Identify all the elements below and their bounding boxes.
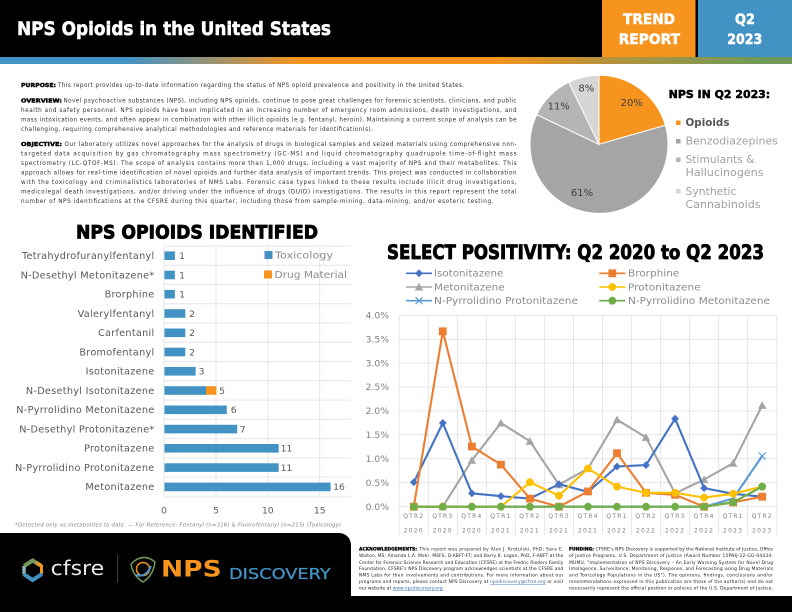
line chart legend: Protonitazene [628, 282, 701, 293]
line chart: select positivity: QTR2 [403, 513, 424, 520]
text block: purpose: This report provides up-to-date information regarding the status of NPS opioid prevalence and positivity in the United States. [57, 83, 464, 89]
line chart: select positivity: 2023 [752, 527, 772, 534]
pie legend: Synthetic [686, 187, 736, 198]
logo: NPS Discovery: DISCOVERY [229, 565, 332, 583]
line chart: select positivity: 3.0% [366, 358, 389, 369]
text block: overview: mass intoxication events, and often appear in combination with other illicit opioids (e.g. fentanyl, heroin). Maintaining a current scope of analysis can be [21, 118, 517, 124]
logo: NPS Discovery: NPS [161, 558, 222, 583]
bar chart: NPS opioids identified: N-Desethyl Metonitazene* [21, 270, 154, 281]
bar chart: NPS opioids identified: N-Pyrrolidino Metonitazene [16, 405, 154, 416]
text block: overview: OVERVIEW: [21, 99, 62, 105]
line chart: select positivity: 2020 [462, 527, 482, 534]
bar chart: NPS opioids identified: 1 [179, 270, 185, 281]
bar chart: NPS opioids identified: 11 [281, 444, 292, 455]
text block: objective [21, 142, 517, 205]
pie legend: Benzodiazepines [686, 136, 778, 148]
line chart: select positivity: 1.0% [366, 454, 389, 465]
line chart: select positivity: 2020 [404, 527, 424, 534]
line chart: select positivity: 1.5% [366, 430, 389, 441]
line chart: select positivity [366, 310, 777, 535]
text block: overview: challenging, requiring comprehensive analytical methodologies and reference materials for identification(s). [21, 127, 373, 133]
text block: funding: and Toxicology Populations in the US"). The opinions, findings, conclusions and/or [569, 572, 773, 578]
line chart: select positivity: 0.5% [366, 478, 389, 489]
footer band [0, 533, 792, 612]
pie chart: NPS in Q2 2023: 61% [571, 188, 593, 199]
pie chart: NPS in Q2 2023: 8% [578, 84, 594, 94]
line chart: select positivity: QTR4 [577, 513, 599, 520]
line chart: select positivity: 2021 [491, 527, 511, 534]
line chart: select positivity: QTR3 [665, 513, 686, 520]
line chart: select positivity: 2.0% [366, 406, 389, 417]
line chart: select positivity: 2022 [694, 527, 714, 534]
text block: acknowledgements: Center for Forensic Science Research and Education (CFSRE) at the Fredric Rieders Family [359, 560, 564, 566]
bar chart: NPS opioids identified: Tetrahydrofuranylfentanyl [21, 251, 154, 262]
line chart: select positivity: 3.5% [366, 334, 389, 345]
line chart: select positivity: QTR1 [490, 513, 511, 520]
badge: trend report: TREND [623, 12, 675, 28]
bar chart: NPS opioids identified: Protonitazene [84, 444, 154, 455]
text block: funding: necessarily represent the official position or policies of the U.S. Department of Justice. [569, 586, 773, 592]
bar chart: NPS opioids identified: 2 [189, 328, 195, 339]
text block: acknowledgements: programs and reports, please contact NPS Discovery at npsdiscovery@cfsre.org or visit [359, 579, 564, 585]
bar chart: NPS opioids identified: 6 [231, 405, 237, 416]
text block: acknowledgements: ACKNOWLEDGEMENTS: [359, 546, 417, 552]
text block: funding [569, 546, 774, 592]
text block: acknowledgements: This report was prepared by Alex J. Krotulski, PhD; Sara E. [418, 546, 563, 552]
line chart: select positivity: 2021 [549, 527, 569, 534]
line chart legend: Metonitazene [434, 282, 505, 293]
bar chart: NPS opioids identified: N-Pyrrolidino Protonitazene [15, 463, 154, 474]
line chart: select positivity: QTR3 [432, 513, 453, 520]
bar chart: NPS opioids identified: Isotonitazene [86, 367, 154, 378]
line chart: select positivity: 2023 [723, 527, 743, 534]
heading: NPS opioids identified: NPS OPIOIDS IDENTIFIED [76, 221, 318, 243]
text block: objective: Our laboratory utilizes novel approaches for the analysis of drugs in biological samples and seized materials using comprehensive non- [64, 142, 517, 148]
bar chart: NPS opioids identified: 11 [281, 463, 292, 474]
text block: overview: health and safety personnel. NPS opioids have been implicated in an increasing number of emergency room admissions, death investigations, and [21, 108, 517, 114]
bar chart: NPS opioids identified: 0 [161, 506, 167, 516]
bar chart: NPS opioids identified: N-Desethyl Protonitazene* [19, 424, 154, 435]
line chart legend: Isotonitazene [434, 269, 504, 280]
line chart: select positivity: 4.0% [366, 310, 389, 322]
bar chart: NPS opioids identified: 5 [213, 506, 219, 516]
bar chart: NPS opioids identified: Bromofentanyl [79, 347, 154, 358]
line chart: select positivity: 2021 [520, 527, 540, 534]
text block: funding: CFSRE's NPS Discovery is supported by the National Institute of Justice, Office [596, 546, 773, 552]
line chart: select positivity: QTR1 [606, 513, 628, 520]
bar chart: NPS opioids identified: Carfentanil [98, 328, 154, 339]
bar chart: NPS opioids identified: N-Desethyl Isotonitazene [26, 386, 154, 397]
text block: acknowledgements: Walton, MS; Amanda L.A. Mohr, MSFS, D-ABFT-FT; and Barry K. Logan, PhD, F-ABFT at the [359, 553, 564, 559]
text block: objective: OBJECTIVE: [21, 142, 62, 148]
line chart legend: N-Pyrrolidino Metonitazene [628, 296, 770, 307]
text block: acknowledgements: NMS Labs for their involvements and contributions. For more information about our [359, 572, 563, 578]
line chart legend [406, 269, 770, 307]
pie chart: NPS in Q2 2023 [530, 75, 668, 213]
bar chart: NPS opioids identified: 5 [219, 386, 225, 397]
line chart: select positivity: QTR4 [461, 513, 482, 520]
text block: funding: of Justice Programs, U.S. Department of Justice (Award Number 15PNIJ-22-GG-04434- [569, 553, 773, 559]
bar chart legend: Drug Material [274, 270, 347, 281]
text block: funding: FUNDING: [569, 546, 594, 552]
bar chart: NPS opioids identified: 7 [240, 424, 246, 435]
logo: NPS Discovery [118, 555, 332, 583]
text block: objective: medicolegal death investigations, and/or driving under the influence of drugs (DUID) investigations. The results in this report represent the total [21, 190, 517, 196]
text block: objective: targeted data acquisition by gas chromatography mass spectrometry (GC-MS) and liquid chromatography quadrupole time-of-flight mass [21, 152, 517, 158]
bar chart legend [264, 250, 347, 281]
text block: funding: recommendations expressed in this publication are those of the author(s) and do not [569, 579, 773, 585]
pie heading: NPS IN Q2 2023: [669, 89, 770, 101]
logo: cfsre: cfsre [51, 556, 104, 580]
bar chart: NPS opioids identified: 1 [179, 251, 185, 262]
line chart: select positivity: QTR2 [519, 513, 540, 520]
title: NPS Opioids in the United States [17, 18, 331, 40]
line chart: select positivity: 2022 [665, 527, 685, 534]
bar chart: NPS opioids identified: 16 [333, 482, 345, 493]
line chart: select positivity: 2.5% [366, 382, 389, 393]
line chart: select positivity: 2022 [607, 527, 627, 534]
text block: acknowledgements: Foundation. CFSRE's NPS Discovery program acknowledges scientists at the CFSRE and [359, 566, 564, 572]
bar chart: NPS opioids identified: 15 [314, 506, 326, 516]
line chart legend: Brorphine [628, 269, 680, 280]
pie legend: Hallucinogens [686, 168, 764, 179]
text block: objective: approach allows for real-time identification of novel opioids and further data analysis of important trends. This project was conducted in collaboration [21, 171, 517, 177]
line chart: select positivity: QTR4 [694, 513, 715, 520]
bar chart legend: Toxicology [274, 250, 334, 262]
header band [0, 0, 792, 64]
logo: cfsre [24, 556, 104, 580]
bar chart: NPS opioids identified: 1 [179, 290, 185, 300]
bar chart: NPS opioids identified [15, 246, 351, 516]
text block: overview [21, 99, 517, 133]
pie legend: Opioids [686, 118, 730, 129]
pie chart: NPS in Q2 2023: 20% [621, 98, 643, 109]
bar chart: NPS opioids identified: 10 [262, 506, 274, 516]
bar chart: NPS opioids identified: 2 [189, 347, 195, 358]
text block: objective: spectrometry (LC-QTOF-MS). The scope of analysis contains more than 1,000 drugs, including a vast majority of NPS and their metabolites. This [21, 161, 517, 167]
line chart: select positivity: 0.0% [366, 502, 389, 513]
text block: funding: MUMU, "Implementation of NPS Discovery – An Early Warning System for Novel Drug [569, 560, 773, 566]
text block: purpose: PURPOSE: [21, 83, 56, 89]
badge: quarter: 2023 [727, 32, 762, 48]
bar chart: NPS opioids identified: Brorphine [105, 290, 154, 300]
text block: acknowledgements [359, 546, 564, 592]
line chart: select positivity: 2020 [433, 527, 453, 534]
badge: quarter: Q2 [735, 12, 755, 28]
bar chart: NPS opioids identified: Valerylfentanyl [78, 309, 154, 320]
text block: overview: Novel psychoactive substances (NPS), including NPS opioids, continue to pose great challenges for forensic scientists, clinicians, and public [64, 99, 517, 105]
pie legend: Cannabinoids [686, 200, 760, 211]
line chart: select positivity: QTR1 [723, 513, 744, 520]
bar chart: NPS opioids identified: 2 [189, 309, 195, 320]
line chart: select positivity: 2021 [578, 527, 598, 534]
line chart legend: N-Pyrrolidino Protonitazene [434, 296, 578, 307]
badge: trend report [602, 0, 696, 57]
text block: objective: number of NPS identifications at the CFSRE during this quarter, including those from sample-mining, data-mining, and/or esoteric testing. [21, 199, 494, 205]
pie chart: NPS in Q2 2023: 11% [548, 102, 570, 112]
bar chart: NPS opioids identified: 3 [199, 367, 205, 378]
line chart: select positivity: QTR2 [752, 513, 773, 520]
badge: trend report: REPORT [619, 32, 680, 48]
pie legend [676, 118, 778, 211]
line chart: select positivity: QTR3 [548, 513, 570, 520]
text block: funding: Intelligence, Surveillance, Monitoring, Response, and Forecasting using Drug Materials [569, 566, 774, 572]
line chart: select positivity: QTR2 [635, 513, 657, 520]
bar chart: NPS opioids identified: Metonitazene [85, 482, 154, 493]
text block: acknowledgements: our website at www.npsdiscovery.org. [359, 586, 444, 592]
pie legend: Stimulants & [686, 155, 755, 166]
footnote: *Detected only as metabolites to date. — For Reference: Fentanyl (n=316) & Fluorofentanyl (n=215) (Toxicology) [15, 522, 341, 528]
text block: objective: with the toxicology and criminalistics laboratories of NMS Labs. Forensic case types linked to these results include illicit drug investigations, [21, 180, 517, 186]
badge: quarter [698, 0, 792, 57]
line chart: select positivity: 2022 [636, 527, 656, 534]
